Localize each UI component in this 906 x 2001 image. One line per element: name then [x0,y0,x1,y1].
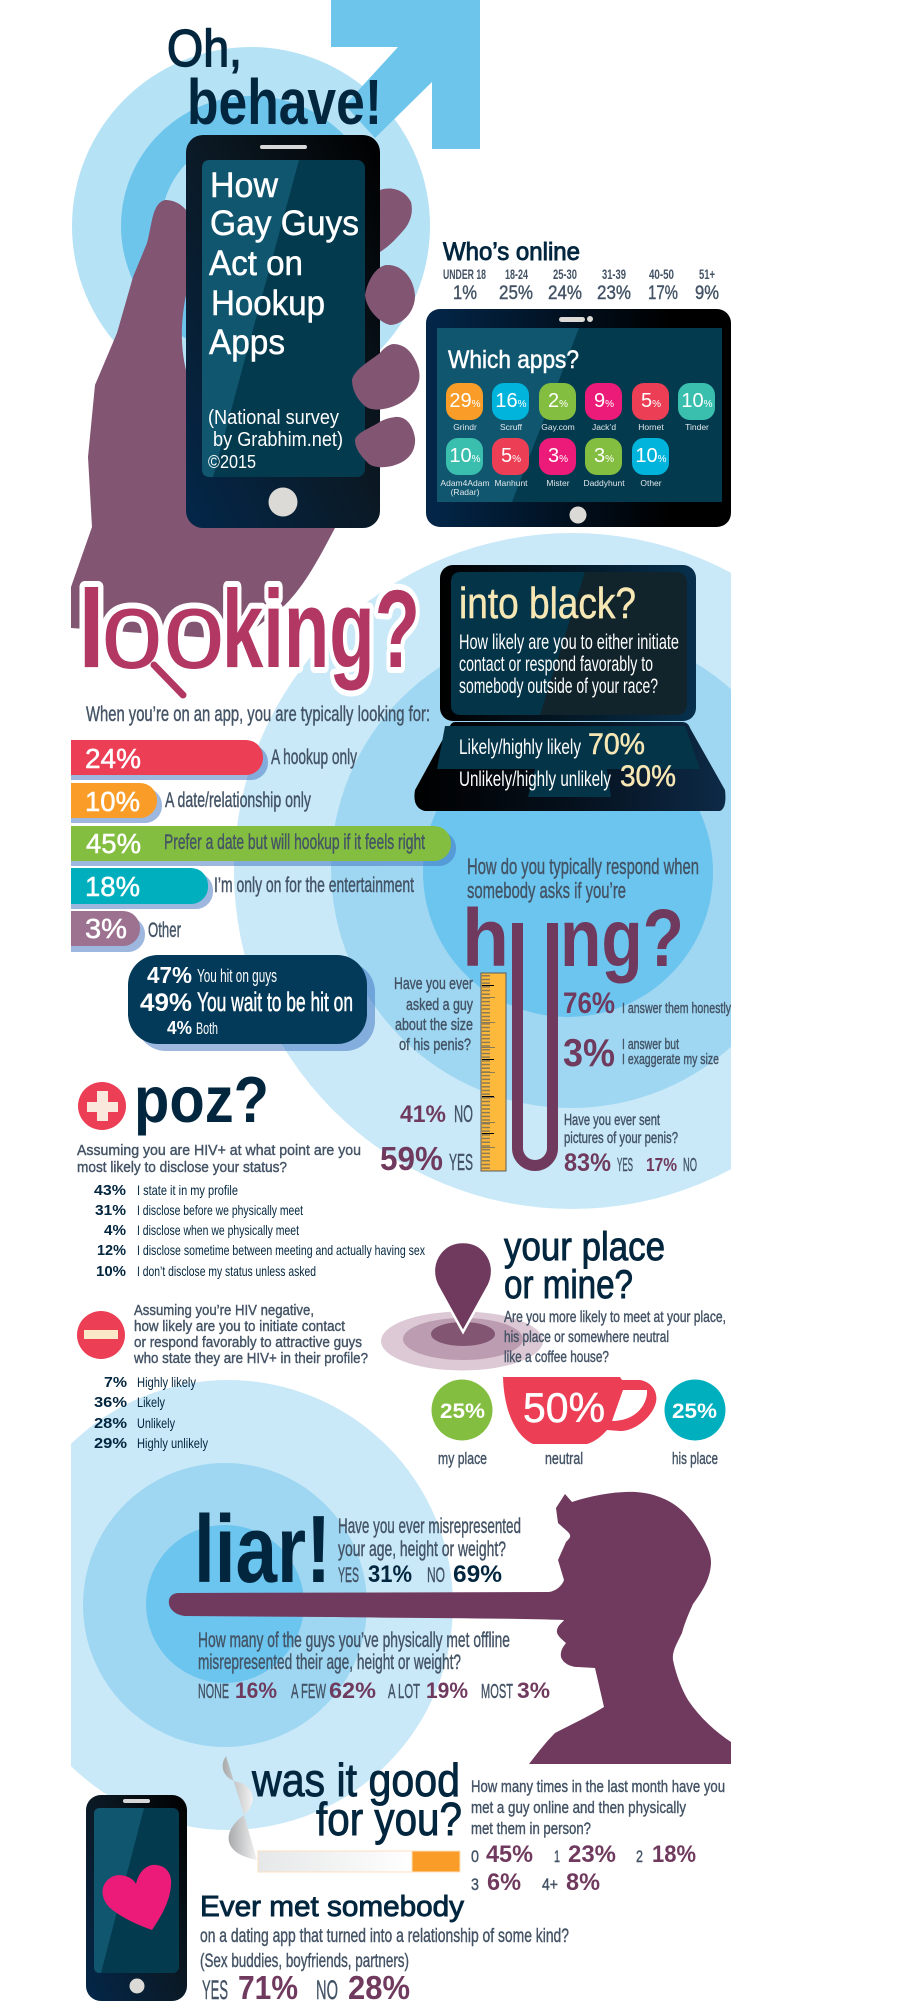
subtitle text: Apps [209,323,285,362]
neutral cup: 50% [523,1384,605,1431]
heading: was it good [251,1754,460,1806]
subtitle text: (National survey [208,407,339,429]
question text [77,1142,361,1176]
app tile percentages: 3% [594,445,614,467]
answers: 18% [652,1841,696,1868]
likelihood list: 29% [94,1435,127,1452]
panel: your place or mine [381,1225,726,1468]
title [167,20,382,138]
title line: Oh: Oh, [167,20,242,78]
background target circles: looking and hung [234,533,731,1209]
icon: magnifying glass handle [154,665,183,695]
question text: on a dating app that turned into a relationship of some kind? [200,1926,569,1947]
app tile percentages: 9% [594,390,614,412]
heading: hung: h [462,893,509,984]
subtitle text: Gay Guys [210,204,359,243]
app tile percentages: 10% [449,445,481,467]
app names: Tinder [685,422,709,432]
app tile percentages [449,390,713,467]
home button [268,488,298,516]
panel: who's online [443,238,719,304]
my place: my place [438,1449,487,1468]
app tile percentages: 29% [449,390,481,412]
heading: looking [78,568,420,695]
panel: tablet which apps [426,309,731,527]
icon: hand holding phone, palm [71,200,335,640]
question one [338,1515,521,1588]
question one: Have you ever misrepresented [338,1515,521,1538]
hung answers: I answer them honestly [622,1001,732,1017]
neutral cup [503,1377,656,1468]
heading: which apps: Which apps? [448,346,579,374]
question text: or respond favorably to attractive guys [134,1334,362,1351]
icon: ruler [481,973,506,1171]
answers: 1 [554,1847,560,1866]
app names: Gay.com [541,422,575,432]
answers: 23% [568,1841,616,1868]
question two: A LOT [388,1681,420,1703]
background target circles: liar [71,1380,452,1830]
icon: cigarette smoke [223,1756,257,1860]
looking word [78,568,420,692]
panel: liar [169,1492,731,1764]
heading [251,1754,462,1845]
pictures question: NO [683,1155,697,1175]
laptop screen [451,572,687,715]
pictures question: 17% [646,1155,677,1175]
age group percentages: 23% [597,283,631,304]
bar: other [71,911,181,946]
subtitle text: Hookup [211,284,325,323]
question text: met them in person? [471,1819,591,1838]
icon: laptop into black [414,565,725,811]
answers: 3 [471,1875,479,1894]
answers: 8% [566,1869,600,1896]
app tiles [446,383,715,475]
icon: map pin [434,1242,492,1332]
subtitle text [208,166,359,472]
disclosure list: 43% [94,1182,126,1199]
callout shadow [136,962,375,1051]
heading: hung: u [512,893,558,984]
pictures question: pictures of your penis? [564,1130,678,1147]
bar: hookup only: A hookup only [271,746,357,769]
app names: (Radar) [451,487,480,497]
question text [504,1309,726,1366]
hung answers: 3% [563,1032,615,1075]
disclosure list: 31% [95,1202,126,1219]
answers: 2 [636,1847,643,1866]
app names: Grindr [453,422,477,432]
ruler question: about the size [395,1015,473,1034]
tablet speaker [559,316,593,322]
ruler question: Have you ever [394,974,473,993]
question two: A FEW [291,1681,326,1703]
app names: Daddyhunt [583,478,625,488]
question text [467,854,699,903]
question one: 69% [453,1561,502,1588]
laptop keyboard area [437,726,700,797]
app tile percentages: 5% [641,390,661,412]
bar: prefer a date: 45% [86,828,141,859]
pictures question [564,1112,697,1177]
question text: like a coffee house? [504,1349,609,1366]
bar: date only: A date/relationship only [165,789,311,812]
pictures question: YES [617,1155,633,1175]
pictures question: Have you ever sent [564,1112,660,1129]
bar: entertainment: 18% [85,871,140,902]
icon: minus [77,1311,125,1359]
ruler answers: 59% [380,1140,443,1177]
ruler answers: YES [449,1149,473,1175]
bar: other: 3% [85,913,127,944]
heading: your place [504,1225,665,1269]
ruler question: asked a guy [406,995,473,1014]
question text: How do you typically respond when [467,854,699,879]
bar: date only [71,783,311,818]
likelihood list: 7% [104,1374,127,1391]
bar: hookup only: 24% [85,743,141,774]
question two [198,1629,550,1703]
question two: How many of the guys you’ve physically met offline [198,1629,510,1652]
question one: 31% [368,1561,412,1588]
subtitle text: Act on [209,244,303,283]
disclosure list: 4% [104,1222,126,1239]
app names: Manhunt [494,478,528,488]
question text: Assuming you are HIV+ at what point are you [77,1142,361,1159]
likelihood list [94,1374,208,1452]
phone: hero [186,135,380,528]
background target circles: header [72,47,430,405]
his place [664,1380,726,1468]
question text: somebody asks if you’re [467,878,626,903]
age group labels [443,266,715,282]
icon: location rings [381,1312,543,1370]
question two: 62% [329,1678,376,1703]
tablet screen [437,328,722,502]
answers: 0 [471,1847,479,1866]
answers: 4+ [542,1875,558,1894]
ruler answers [380,1101,473,1177]
bar: other: Other [148,919,181,942]
his place: his place [672,1449,718,1468]
disclosure list: I disclose when we physically meet [137,1222,299,1238]
age group labels: 51+ [699,266,715,282]
hung answers: 76% [563,987,615,1020]
disclosure list: I don’t disclose my status unless asked [137,1263,316,1279]
answers: 70% [588,728,645,761]
subtitle text: How [210,166,279,205]
callout: who hits on whom: You hit on guys [197,966,277,986]
title line: behave: behave! [187,66,382,138]
question two: MOST [481,1681,513,1703]
callout: who hits on whom: Both [196,1019,218,1038]
disclosure list: I state it in my profile [137,1182,238,1198]
callout: who hits on whom: 49% [140,989,192,1017]
heading: hung: ng? [560,893,684,984]
heading: or mine? [504,1263,633,1307]
question two: misrepresented their age, height or weight? [198,1651,461,1674]
question one: YES [338,1564,359,1587]
icon: fingers [352,188,420,467]
callout pill [128,955,367,1044]
answers: 30% [620,760,676,793]
app names: Jack’d [592,422,616,432]
laptop screen highlight [451,572,585,715]
icon: heart [102,1865,171,1930]
age group labels: 25-30 [553,266,577,282]
likelihood list: 36% [94,1394,127,1411]
looking word: king? [222,568,420,691]
answers [202,1969,410,2001]
bar chart: what you look for [71,740,456,952]
answers: Likely/highly likely [459,736,581,759]
icon: Pinocchio head silhouette [169,1492,731,1764]
heading [504,1225,665,1307]
heading: for you? [316,1793,462,1845]
app tile percentages: 3% [548,445,568,467]
hung answers: I exaggerate my size [622,1052,719,1068]
ruler question: of his penis? [399,1035,471,1054]
likelihood list: Highly unlikely [137,1435,208,1451]
age group labels: 18-24 [505,266,528,282]
tablet body [426,309,731,527]
subtitle text: ©2015 [208,452,256,472]
panel: hung [380,854,732,1177]
question one: your age, height or weight? [338,1538,506,1561]
pictures question: 83% [564,1149,611,1177]
likelihood list: Unlikely [137,1415,175,1431]
panel: poz [77,1063,425,1280]
heading: liar: liar! [194,1496,331,1603]
question text [471,1777,725,1838]
small phone home button [130,1978,144,1994]
bar: prefer a date: Prefer a date but will hookup if it feels right [164,831,425,854]
question text: most likely to disclose your status? [77,1159,287,1176]
question text: who state they are HIV+ in their profile? [133,1350,368,1367]
question text: How many times in the last month have you [471,1777,725,1796]
answers: 45% [486,1841,533,1868]
question text [133,1302,368,1367]
question two: NONE [198,1681,229,1703]
bar: entertainment [71,868,414,904]
my place: 25% [440,1400,485,1423]
app names: Adam4Adam [440,478,490,488]
laptop base [414,722,725,811]
heading: who's online: Who’s online [443,238,580,266]
age group percentages: 24% [548,283,582,304]
question text: Are you more likely to meet at your place, [504,1309,726,1326]
panel: HIV negative [77,1302,368,1452]
answers: Unlikely/highly unlikely [459,768,611,791]
icon: cigarette [258,1851,460,1872]
age group labels: UNDER 18 [443,266,486,282]
age group percentages: 9% [695,283,719,304]
answers [471,1841,696,1896]
callout: who hits on whom: 47% [147,962,192,988]
question text: (Sex buddies, boyfriends, partners) [200,1951,409,1972]
callout: who hits on whom: 4% [167,1018,192,1038]
his place: 25% [672,1400,717,1423]
question text: his place or somewhere neutral [504,1329,669,1346]
bar: date only: 10% [85,786,140,817]
question text: Assuming you’re HIV negative, [134,1302,314,1319]
hung answers [563,987,732,1075]
disclosure list [94,1182,425,1280]
app tile percentages: 10% [681,390,713,412]
question text: How likely are you to either initiate [459,631,679,654]
app tile percentages: 5% [501,445,521,467]
age group percentages: 1% [453,283,477,304]
icon: male symbol arrow [331,0,480,149]
likelihood list: Highly likely [137,1374,196,1390]
callout: who hits on whom: You wait to be hit on [197,987,353,1017]
app names: Mister [546,478,570,488]
phone screen [202,160,365,477]
heading: hung [467,906,680,984]
question one: NO [427,1564,445,1587]
hung answers: I answer but [622,1037,679,1053]
looking word: l [78,568,105,691]
app tile percentages: 10% [635,445,667,467]
small phone screen [94,1808,179,1973]
tablet highlight [437,328,579,502]
bar: prefer a date [71,826,451,861]
app names: Hornet [638,422,664,432]
app tile percentages: 2% [548,390,568,412]
age group labels: 40-50 [649,266,674,282]
app names: Scruff [500,422,523,432]
question two: 3% [517,1678,550,1703]
small phone speaker [123,1799,150,1803]
age group percentages [453,283,719,304]
question text: contact or respond favorably to [459,653,653,676]
subtitle text: by Grabhim.net) [213,429,343,451]
disclosure list: 10% [96,1263,126,1280]
likelihood list: 28% [94,1415,127,1432]
ruler question [394,974,473,1054]
answers [459,728,676,793]
small phone highlight [94,1808,144,1973]
app names [440,422,709,497]
heading: Ever met somebody [200,1891,465,1923]
age group labels: 31-39 [602,266,626,282]
ruler answers: NO [454,1101,473,1128]
looking word: oo [101,569,225,692]
panel: was it good for you [223,1754,725,1896]
my place [432,1380,492,1468]
disclosure list: I disclose sometime between meeting and actually having sex [137,1242,425,1258]
age group percentages: 25% [499,283,533,304]
text: looking question: When you’re on an app, you are typically looking for: [86,703,430,726]
app names: Other [640,478,662,488]
question text: how likely are you to initiate contact [134,1318,346,1335]
speaker [260,145,307,149]
laptop lid [440,565,696,721]
disclosure list: I disclose before we physically meet [137,1202,303,1218]
question text [459,631,679,698]
question text: met a guy online and then physically [471,1798,686,1817]
question text: somebody outside of your race? [459,675,658,698]
heading: into black: into black? [459,579,636,628]
icon: plus [78,1082,126,1130]
question text [200,1926,569,1972]
question two: 16% [235,1678,277,1703]
callout: who hits on whom [128,955,375,1051]
panel: ever met somebody [86,1795,569,2001]
icon: phone with heart [86,1795,187,2001]
ruler answers: 41% [400,1101,446,1128]
answers: 6% [487,1869,521,1896]
phone body [186,135,380,528]
heading: poz: poz? [134,1063,269,1136]
bar: entertainment: I’m only on for the entertainment [214,874,414,897]
U shape [518,923,552,1166]
bar shadows [71,745,456,952]
app tile percentages: 16% [495,390,527,412]
question two: 19% [426,1678,468,1703]
small phone body [86,1795,187,2001]
age group percentages: 17% [648,283,678,304]
tablet home button [570,506,586,524]
screen highlight [202,160,299,477]
disclosure list: 12% [97,1242,126,1259]
bar: hookup only [71,740,357,775]
neutral cup: neutral [545,1449,583,1468]
likelihood list: Likely [137,1394,165,1410]
